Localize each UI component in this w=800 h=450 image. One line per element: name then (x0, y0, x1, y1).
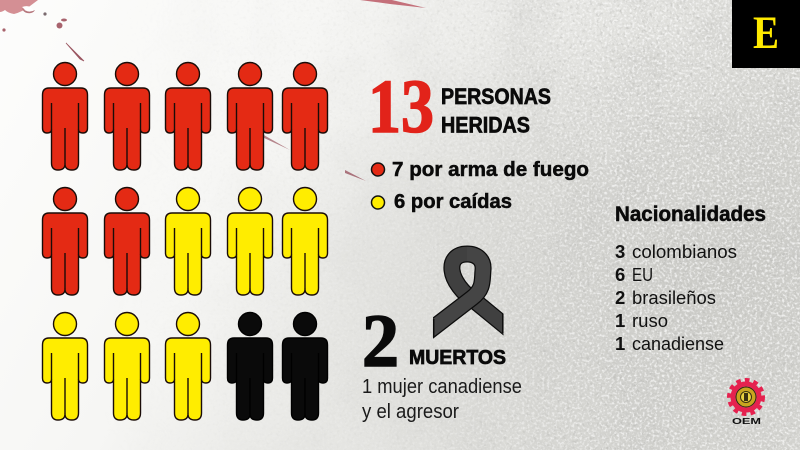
person: red 7 (104, 188, 150, 295)
heading: 2 muertos: MUERTOS (409, 347, 506, 369)
row: ruso: 1 (615, 310, 625, 331)
heading: 13 personas heridas: HERIDAS (441, 112, 530, 138)
icon: black mourning ribbon (432, 246, 504, 339)
logo: E badge: E (753, 7, 779, 59)
person: red 3 (166, 62, 210, 170)
text: detail of the dead: 1 mujer canadiense (362, 376, 522, 398)
legend: 7 por arma de fuego: 7 por arma de fuego (392, 158, 589, 181)
person: red 6 (42, 188, 88, 295)
heading: 2 muertos (362, 300, 506, 383)
row: colombianos: colombianos (632, 241, 737, 262)
person: yellow 2 (228, 188, 272, 295)
icon: 15 person pictogram grid (42, 62, 328, 420)
logo: E badge (732, 0, 800, 68)
legend: 6 por caídas: 6 por caídas (394, 190, 512, 213)
row: EU: 6 (615, 264, 625, 285)
person: yellow 4 (42, 312, 88, 420)
person: red 4 (228, 62, 272, 170)
heading: 2 muertos: 2 (362, 300, 399, 383)
row: ruso: ruso (632, 310, 668, 331)
heading: 13 personas heridas: 13 (368, 65, 434, 149)
heading: nacionalidades: Nacionalidades (615, 203, 766, 226)
heading: 13 personas heridas: PERSONAS (441, 84, 551, 109)
text: detail of the dead: y el agresor (362, 401, 459, 423)
row: ruso (615, 310, 668, 331)
panel: nacionalidades (615, 203, 766, 354)
person: black 2 (282, 312, 328, 420)
person: red 2 (104, 62, 150, 170)
person: red 1 (42, 62, 88, 170)
person: red 5 (282, 62, 328, 170)
blood splatters (0, 0, 426, 181)
person: yellow 5 (104, 312, 150, 420)
row: EU (615, 264, 653, 285)
heading: 13 personas heridas (368, 65, 551, 149)
row: canadiense: 1 (615, 333, 625, 354)
text: detail of the dead (362, 376, 522, 423)
person: yellow 1 (166, 188, 210, 295)
logo: OEM (730, 380, 762, 426)
person: black 1 (228, 312, 272, 420)
row: canadiense: canadiense (632, 333, 724, 354)
row: brasileños: brasileños (632, 287, 716, 308)
row: brasileños: 2 (615, 287, 625, 308)
person: yellow 6 (166, 312, 210, 420)
row: colombianos: 3 (615, 241, 625, 262)
logo: OEM: OEM (732, 417, 762, 426)
person: yellow 3 (282, 188, 328, 295)
row: EU: EU (632, 264, 653, 285)
